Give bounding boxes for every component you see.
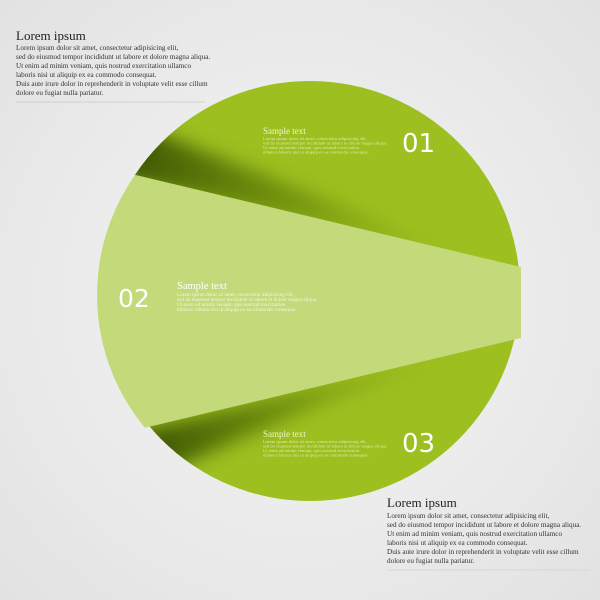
slice 02 band — [97, 175, 521, 428]
circle diagram — [60, 81, 530, 501]
text block: bottom-right: Duis aute irure dolor in reprehenderit in voluptate velit esse cillum — [387, 548, 579, 556]
text block: bottom-right: Lorem ipsum dolor sit amet, consectetur adipisicing elit, — [387, 512, 549, 520]
label 01 — [263, 126, 435, 159]
text block: bottom-right: laboris nisi ut aliquip ex ea commodo consequat. — [387, 539, 528, 547]
label 02: sed do eiusmod tempor incididunt ut labore et dolore magna aliqua. — [177, 297, 317, 303]
shadow below band — [150, 376, 374, 469]
text block: bottom-right: sed do eiusmod tempor incididunt ut labore et dolore magna aliqua. — [387, 521, 581, 529]
text block: bottom-right: Lorem ipsum — [387, 495, 457, 510]
text block: top-left: Ut enim ad minim veniam, quis nostrud exercitation ullamco — [16, 62, 191, 70]
label 02 — [118, 281, 317, 313]
text block: top-left: dolore eu fugiat nulla pariatur. — [16, 89, 103, 97]
label 01: Lorem ipsum dolor sit amet, consectetur adipisicing elit, — [263, 136, 367, 142]
label 03: 03 — [402, 429, 435, 459]
text block: top-left: Lorem ipsum — [16, 28, 86, 43]
text block: top-left — [16, 28, 210, 102]
slice 01 and 03 base circle — [100, 81, 520, 501]
label 03: sed do eiusmod tempor incididunt ut labore et dolore magna aliqua. — [263, 444, 387, 448]
text block: top-left: sed do eiusmod tempor incididunt ut labore et dolore magna aliqua. — [16, 53, 210, 61]
shadow above band — [135, 128, 391, 236]
label 01: sed do eiusmod tempor incididunt ut labore et dolore magna aliqua. — [263, 140, 387, 146]
text block: top-left: Duis aute irure dolor in reprehenderit in voluptate velit esse cillum — [16, 80, 208, 88]
text block: bottom-right: Ut enim ad minim veniam, quis nostrud exercitation ullamco — [387, 530, 562, 538]
label 03: Sample text — [263, 429, 306, 439]
label 03: ullamco laboris nisi ut aliquip ex ea commodo consequat. — [263, 452, 369, 458]
label 03: Lorem ipsum dolor sit amet, consectetur adipisicing elit, — [263, 439, 367, 445]
text block: bottom-right: dolore eu fugiat nulla pariatur. — [387, 557, 474, 565]
label 02: Lorem ipsum dolor sit amet, consectetur adipisicing elit, — [177, 292, 294, 298]
label 02: ullamco laboris nisi ut aliquip ex ea commodo consequat. — [177, 307, 296, 313]
label 01: Sample text — [263, 126, 306, 136]
label 03: Ut enim ad minim veniam, quis nostrud exercitation — [263, 448, 360, 454]
text block: top-left: Lorem ipsum dolor sit amet, consectetur adipisicing elit, — [16, 44, 178, 52]
label 02: Sample text — [177, 281, 227, 292]
label 01: 01 — [402, 129, 435, 159]
label 01: ullamco laboris nisi ut aliquip ex ea commodo consequat. — [263, 150, 369, 154]
label 02: Ut enim ad minim veniam, quis nostrud exercitation — [177, 302, 286, 308]
label 01: Ut enim ad minim veniam, quis nostrud exercitation — [263, 145, 360, 151]
label 02: 02 — [118, 284, 150, 313]
label 03 — [263, 429, 435, 459]
text block: bottom-right — [387, 495, 590, 570]
text block: top-left: laboris nisi ut aliquip ex ea commodo consequat. — [16, 71, 157, 79]
